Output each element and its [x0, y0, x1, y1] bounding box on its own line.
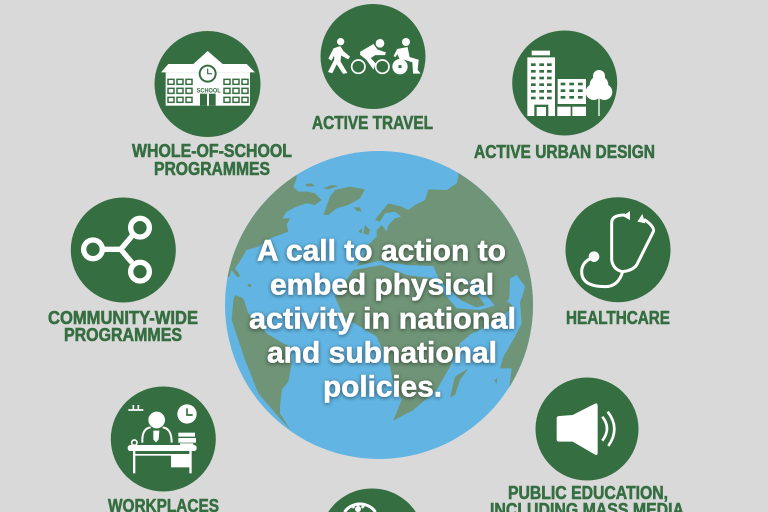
item: community-wide programmes [48, 198, 198, 345]
label: ACTIVE URBAN DESIGN [474, 142, 655, 162]
central message: and subnational [267, 336, 497, 370]
central message: policies. [323, 370, 442, 404]
label: ACTIVE TRAVEL [312, 113, 433, 133]
icon: school: SCHOOL [197, 87, 221, 94]
central message [249, 234, 516, 404]
label: PUBLIC EDUCATION, [508, 483, 668, 503]
label [132, 141, 292, 179]
item: healthcare [566, 197, 670, 328]
icon: walker, cyclist, wheelchair user [329, 38, 420, 74]
icon: stethoscope [582, 211, 654, 287]
item: bottom circle, cropped [328, 488, 416, 512]
icon: loudspeaker [557, 403, 614, 455]
label: PROGRAMMES [154, 159, 270, 179]
label: HEALTHCARE [566, 308, 670, 328]
icon: school [161, 51, 255, 106]
label [490, 483, 684, 512]
item: workplaces [108, 386, 219, 512]
icon: network nodes [84, 218, 149, 281]
globe [220, 151, 540, 459]
central message: embed physical [270, 268, 494, 302]
icon: buildings and tree [527, 51, 612, 116]
central message: activity in national [249, 302, 516, 336]
item: whole-of-school programmes [132, 31, 292, 179]
item: public education, including mass media [490, 378, 684, 512]
icon: person at desk [128, 404, 197, 473]
label: WHOLE-OF-SCHOOL [132, 141, 292, 161]
label: PROGRAMMES [64, 325, 182, 345]
icon: ring with gear [344, 503, 376, 512]
item: active travel [312, 4, 433, 133]
central message: A call to action to [257, 234, 506, 268]
label [48, 308, 198, 345]
label: COMMUNITY-WIDE [48, 308, 198, 328]
item: active urban design [474, 30, 655, 162]
